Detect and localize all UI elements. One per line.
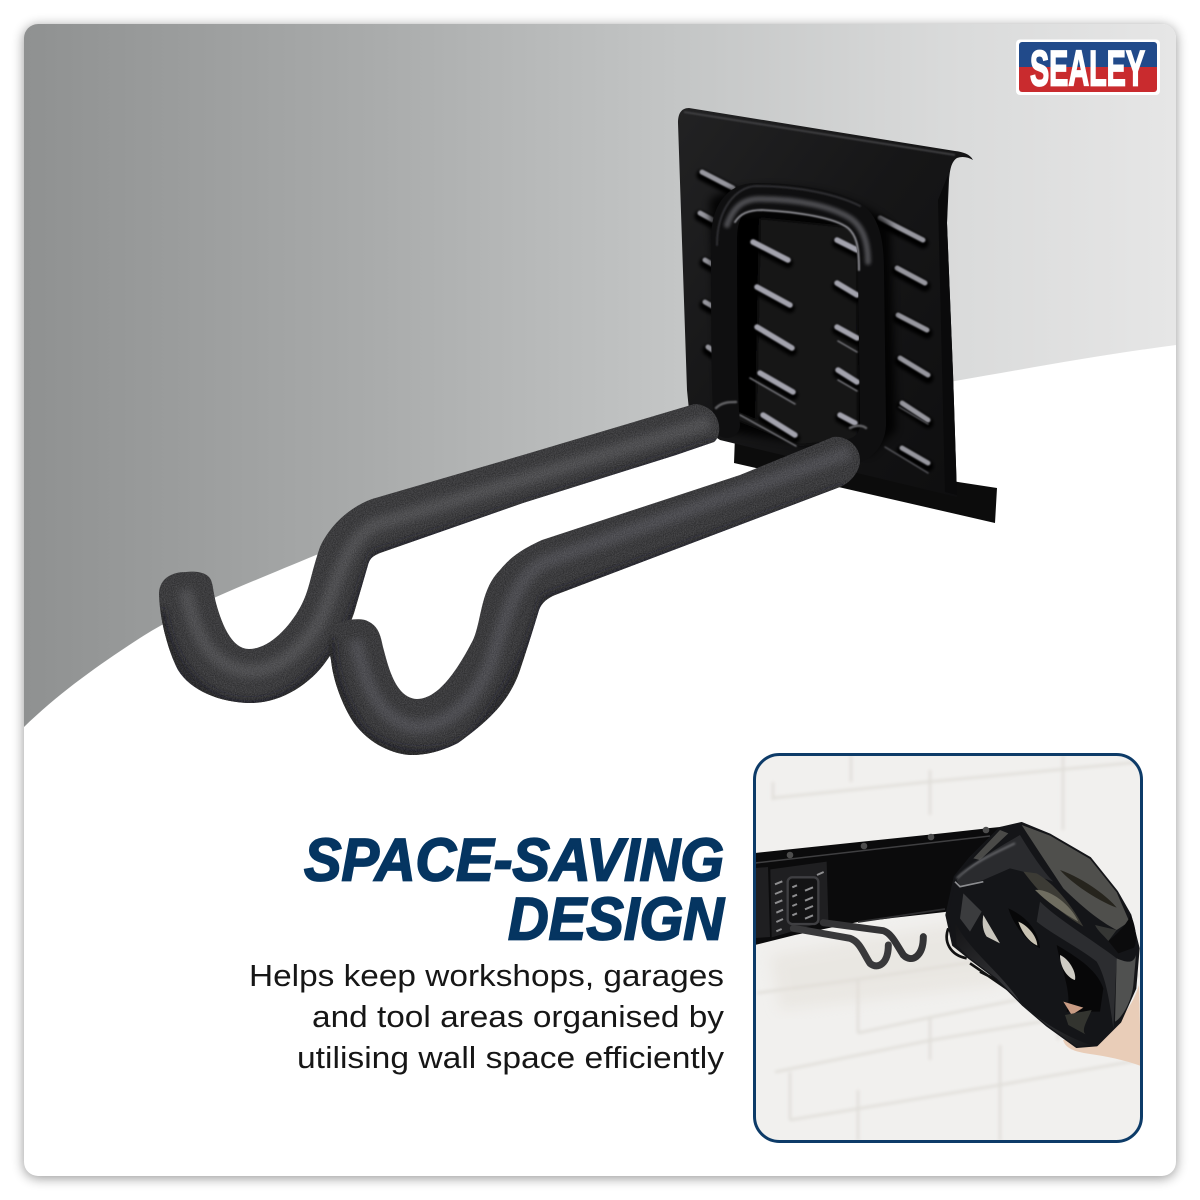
front foam arm — [320, 430, 870, 760]
panel: in-use photo of helmet on hook — [754, 754, 1142, 1142]
brick wall — [755, 755, 1141, 1141]
helmet rear straps — [945, 928, 1008, 991]
heading: SPACE-SAVING — [304, 826, 724, 894]
body text: Helps keep workshops, garages — [249, 958, 724, 993]
mounting plate — [678, 108, 997, 523]
plate embossed slots — [700, 172, 928, 473]
helmet — [947, 823, 1138, 1047]
mini hooks — [793, 923, 923, 966]
dark shadow around the frame — [710, 187, 896, 455]
wall rail — [755, 826, 1010, 945]
body text: and tool areas organised by — [312, 999, 725, 1034]
mini bracket — [770, 862, 828, 937]
heading: DESIGN — [508, 886, 726, 952]
rear foam arm — [150, 395, 730, 715]
photo frame border — [754, 754, 1142, 1142]
inner slots — [740, 240, 857, 446]
body text: utilising wall space efficiently — [297, 1040, 725, 1075]
body text — [249, 958, 725, 1075]
logo: SEALEY — [1016, 40, 1160, 96]
wire frame loop — [716, 186, 873, 450]
product: wall hook with plate and foam arms — [150, 108, 997, 760]
heading — [304, 826, 726, 952]
helmet velcro strap — [1108, 914, 1136, 953]
hand — [1063, 985, 1141, 1066]
helmet vents — [960, 893, 982, 932]
dark recess inside the frame — [737, 216, 858, 445]
